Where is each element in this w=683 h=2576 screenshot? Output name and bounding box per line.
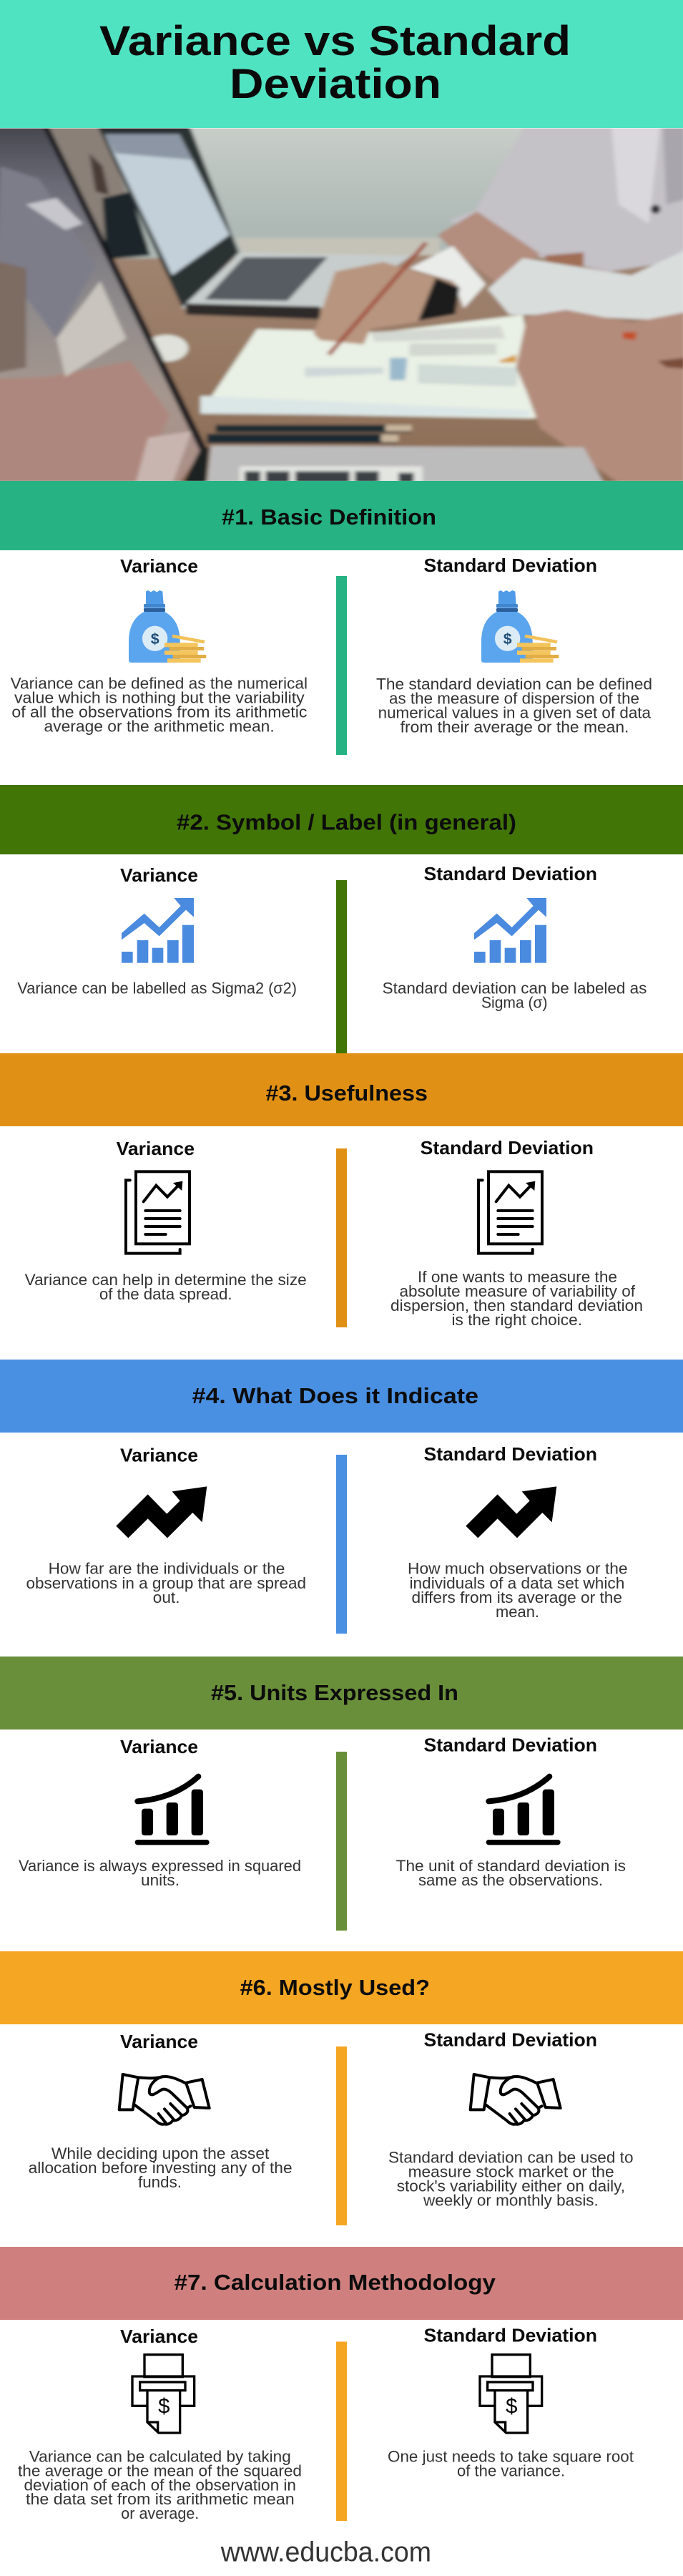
text: standard deviation indication: individuals of a data set which	[409, 1574, 624, 1592]
text: variance usage: While deciding upon the asset	[51, 2145, 269, 2162]
panel: #3 Usefulness	[0, 1053, 683, 1329]
heading: #4. What Does it Indicate	[192, 1383, 478, 1408]
text: standard deviation symbol: Standard deviation can be labeled as	[383, 979, 647, 997]
text: standard deviation definition: from their average or the mean.	[401, 718, 629, 736]
icon: money bag left: $	[151, 630, 159, 648]
icon: handshake left	[119, 2074, 210, 2124]
text: standard deviation units	[396, 1857, 626, 1889]
text: standard deviation calculation	[388, 2447, 634, 2479]
text: variance calculation: the average or the mean of the squared	[18, 2462, 302, 2479]
heading: #6. Mostly Used?	[240, 1975, 430, 2000]
column title: Variance: Variance	[120, 2326, 198, 2347]
footer: website: www.educba.com	[220, 2537, 431, 2567]
column title: Standard Deviation: Standard Deviation	[423, 1735, 597, 1756]
title: Variance vs Standard	[99, 18, 571, 64]
text: standard deviation symbol	[383, 979, 647, 1011]
text: variance units: units.	[141, 1871, 180, 1889]
heading: #7. Calculation Methodology	[175, 2270, 496, 2295]
column title: Standard Deviation: Standard Deviation	[423, 863, 597, 884]
column title: Variance: Variance	[120, 864, 198, 886]
text: variance definition: of all the observations from its arithmetic	[11, 703, 307, 721]
text: variance definition: value which is nothing but the variability	[14, 689, 305, 707]
column title: Standard Deviation: Standard Deviation	[421, 1137, 594, 1158]
column title: Standard Deviation: Standard Deviation	[423, 1443, 597, 1465]
text: variance calculation	[18, 2447, 302, 2522]
text: variance calculation: or average.	[121, 2504, 199, 2522]
text: standard deviation usefulness: is the right choice.	[452, 1311, 582, 1329]
text: standard deviation usefulness: If one wants to measure the	[418, 1268, 617, 1286]
text: variance symbol: Variance can be labelled as Sigma2 (σ2)	[17, 979, 297, 997]
text: variance indication: out.	[153, 1589, 180, 1606]
text: standard deviation symbol: Sigma (σ)	[481, 993, 548, 1011]
text: variance units	[19, 1857, 301, 1889]
text: standard deviation definition	[376, 675, 652, 736]
divider	[336, 576, 347, 755]
text: standard deviation usage: weekly or monthly basis.	[423, 2191, 599, 2209]
text: standard deviation calculation: of the variance.	[457, 2462, 565, 2479]
panel: #5 Units Expressed In	[0, 1657, 683, 1931]
heading: #2. Symbol / Label (in general)	[177, 810, 516, 834]
icon: handshake right	[471, 2074, 561, 2124]
text: variance calculation: deviation of each of the observation in	[24, 2476, 296, 2494]
text: variance usage: allocation before investing any of the	[29, 2159, 293, 2177]
panel: #4 What Does it Indicate	[0, 1360, 683, 1634]
text: standard deviation usefulness: dispersion, then standard deviation	[390, 1297, 643, 1314]
text: variance usefulness	[25, 1271, 307, 1303]
icon: printer with dollar receipt left	[132, 2355, 195, 2433]
icon: zigzag arrow right	[466, 1486, 556, 1538]
icon: growth chart left	[122, 898, 194, 963]
text: standard deviation definition: The standard deviation can be defined	[376, 675, 652, 693]
icon: money bag left	[129, 590, 206, 663]
text: variance usage: funds.	[138, 2173, 182, 2191]
text: standard deviation calculation: One just needs to take square root	[388, 2447, 634, 2466]
text: standard deviation indication: How much observations or the	[408, 1560, 628, 1578]
icon: printer with dollar receipt right	[480, 2355, 542, 2433]
photo: people working at laptops with documents	[0, 129, 683, 481]
text: standard deviation indication: differs from its average or the	[412, 1589, 622, 1606]
icon: printer with dollar receipt left: $	[158, 2395, 169, 2419]
heading: #1. Basic Definition	[222, 504, 436, 530]
heading: #5. Units Expressed In	[211, 1680, 458, 1705]
panel: #6 Mostly Used?	[0, 1951, 683, 2225]
panel: #2 Symbol / Label	[0, 785, 683, 1053]
panel: #1 Basic Definition	[0, 481, 683, 755]
column title: Standard Deviation: Standard Deviation	[423, 2324, 597, 2346]
icon: growth chart right	[474, 898, 546, 963]
text: variance calculation: Variance can be calculated by taking	[29, 2447, 291, 2466]
column title: Variance: Variance	[120, 555, 198, 577]
text: variance usefulness: of the data spread.	[99, 1285, 232, 1303]
icon: bar chart left	[137, 1777, 207, 1843]
icon: report right	[478, 1171, 542, 1254]
divider	[336, 1148, 347, 1327]
title banner	[0, 0, 683, 128]
column title: Variance: Variance	[120, 2031, 198, 2052]
column title: Variance: Variance	[120, 1444, 198, 1465]
column title: Standard Deviation: Standard Deviation	[423, 555, 597, 576]
text: variance definition: average or the arithmetic mean.	[44, 717, 275, 736]
text: standard deviation usage: Standard deviation can be used to	[388, 2149, 634, 2167]
icon: printer with dollar receipt right: $	[506, 2395, 517, 2419]
divider	[336, 1752, 347, 1931]
text: variance usefulness: Variance can help in determine the size	[25, 1271, 307, 1289]
text: standard deviation usefulness: absolute measure of variability of	[399, 1282, 636, 1300]
text: standard deviation indication	[408, 1560, 628, 1621]
text: variance definition: Variance can be defined as the numerical	[11, 674, 308, 692]
text: variance indication: How far are the individuals or the	[49, 1560, 285, 1578]
divider	[336, 1455, 347, 1634]
text: standard deviation units: same as the observations.	[418, 1871, 603, 1889]
icon: bar chart right	[488, 1777, 558, 1843]
text: standard deviation definition: numerical values in a given set of data	[378, 704, 652, 722]
column title: Standard Deviation: Standard Deviation	[423, 2029, 597, 2051]
text: standard deviation definition: as the measure of dispersion of the	[389, 690, 639, 708]
column title: Variance: Variance	[117, 1138, 195, 1159]
icon: money bag right	[481, 590, 559, 663]
text: variance indication: observations in a group that are spread	[26, 1574, 306, 1592]
text: standard deviation usage: measure stock market or the	[408, 2162, 614, 2181]
title: Deviation	[230, 61, 441, 107]
divider	[336, 880, 347, 1053]
icon: report left	[126, 1171, 190, 1254]
panel: #7 Calculation Methodology	[0, 2247, 683, 2522]
text: variance usage	[29, 2145, 293, 2191]
column title: Variance: Variance	[120, 1736, 198, 1757]
icon: money bag right: $	[503, 630, 512, 648]
text: variance indication	[26, 1560, 306, 1606]
text: standard deviation usage: stock's variability either on daily,	[397, 2177, 625, 2195]
divider	[336, 2046, 347, 2225]
text: standard deviation indication: mean.	[496, 1603, 539, 1621]
text: standard deviation usefulness	[390, 1268, 643, 1329]
heading: #3. Usefulness	[266, 1080, 428, 1106]
text: variance units: Variance is always expressed in squared	[19, 1857, 301, 1875]
text: variance calculation: the data set from its arithmetic mean	[26, 2490, 295, 2508]
text: variance definition	[11, 674, 308, 736]
divider	[336, 2341, 347, 2521]
text: standard deviation units: The unit of standard deviation is	[396, 1857, 626, 1875]
icon: zigzag arrow left	[116, 1486, 207, 1538]
title	[99, 18, 571, 107]
text: standard deviation usage	[388, 2149, 634, 2209]
